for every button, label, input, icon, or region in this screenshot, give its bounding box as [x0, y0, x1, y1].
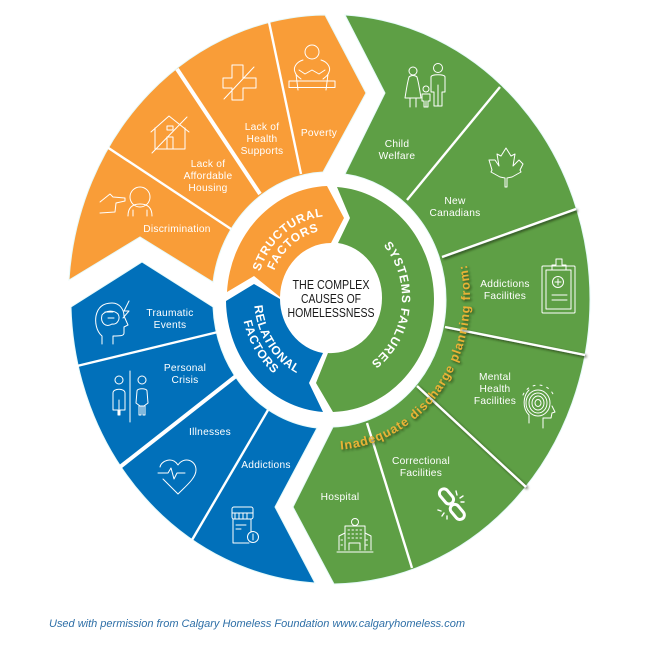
label: lack of health supports: Health: [247, 134, 277, 145]
panel: relational factors ring segment: [226, 284, 323, 412]
icon: clipboard: [542, 259, 575, 313]
label: traumatic events: Traumatic: [146, 308, 194, 319]
label: correctional facilities: Correctional: [392, 456, 450, 467]
panel: relational factors outer segments: [71, 262, 317, 583]
label: hospital: Hospital: [321, 492, 359, 503]
label: lack of health supports: Supports: [241, 146, 283, 157]
label: mental health facilities: Facilities: [474, 396, 516, 407]
icon: man and woman divided: [113, 371, 148, 422]
heading: systems failures: SYSTEMS FAILURES: [372, 242, 410, 368]
label: mental health facilities: Health: [480, 384, 510, 395]
label: personal crisis: Crisis: [172, 375, 198, 386]
icon: head with concentric rings: [523, 385, 555, 428]
label: new canadians: Canadians: [430, 208, 480, 219]
orange outer sector: [69, 15, 366, 282]
icon: health cross crossed out: [223, 65, 256, 100]
icon: family: [405, 64, 445, 107]
icon: hospital: [337, 518, 373, 552]
title: centre circle: HOMELESSNESS: [288, 305, 375, 320]
icon: pill bottle: [232, 507, 258, 543]
label: child welfare: Child: [385, 139, 409, 150]
label: lack of affordable housing: Lack of: [191, 159, 225, 170]
panel: structural factors outer segments: [69, 15, 366, 282]
panel: systems failures ring segment: [316, 187, 434, 412]
label: correctional facilities: Facilities: [400, 468, 442, 479]
icon: house crossed out: [151, 116, 189, 153]
title: centre circle: CAUSES OF: [301, 291, 361, 306]
icon: pointing hand and person: [100, 187, 152, 216]
label: mental health facilities: Mental: [479, 372, 511, 383]
label: new canadians: New: [444, 196, 466, 207]
label: discrimination: Discrimination: [143, 224, 211, 235]
label: lack of affordable housing: Affordable: [184, 171, 232, 182]
label: illnesses: Illnesses: [189, 427, 231, 438]
label: addictions facilities: Facilities: [484, 291, 526, 302]
title: centre circle: THE COMPLEX: [292, 277, 370, 292]
label: child welfare: Welfare: [379, 151, 415, 162]
icon: heart with pulse: [158, 460, 196, 494]
green outer sector: [293, 15, 590, 584]
callout: inadequate discharge planning: Inadequate discharge planning from:: [340, 266, 476, 452]
footer credit: Used with permission from Calgary Homeless Foundation www.calgaryhomeless.com: [49, 618, 465, 630]
icon: poverty, seated person: [289, 45, 335, 90]
label: personal crisis: Personal: [164, 363, 206, 374]
blue outer sector: [71, 262, 317, 583]
heading: relational factors: RELATIONALFACTORS: [244, 305, 297, 373]
panel: structural factors ring segment: [227, 186, 344, 297]
label: traumatic events: Events: [154, 320, 186, 331]
icon: head with brain and lightning: [96, 301, 129, 344]
icon: maple leaf: [489, 148, 523, 187]
panel: systems failures outer segments: [293, 15, 590, 584]
icon: broken chain: [438, 487, 466, 521]
label: addictions facilities: Addictions: [480, 279, 530, 290]
label: addictions: Addictions: [241, 460, 291, 471]
heading: structural factors: STRUCTURAL FACTORS: [253, 209, 323, 270]
label: lack of health supports: Lack of: [245, 122, 279, 133]
label: poverty: Poverty: [301, 128, 338, 139]
label: lack of affordable housing: Housing: [188, 183, 228, 194]
